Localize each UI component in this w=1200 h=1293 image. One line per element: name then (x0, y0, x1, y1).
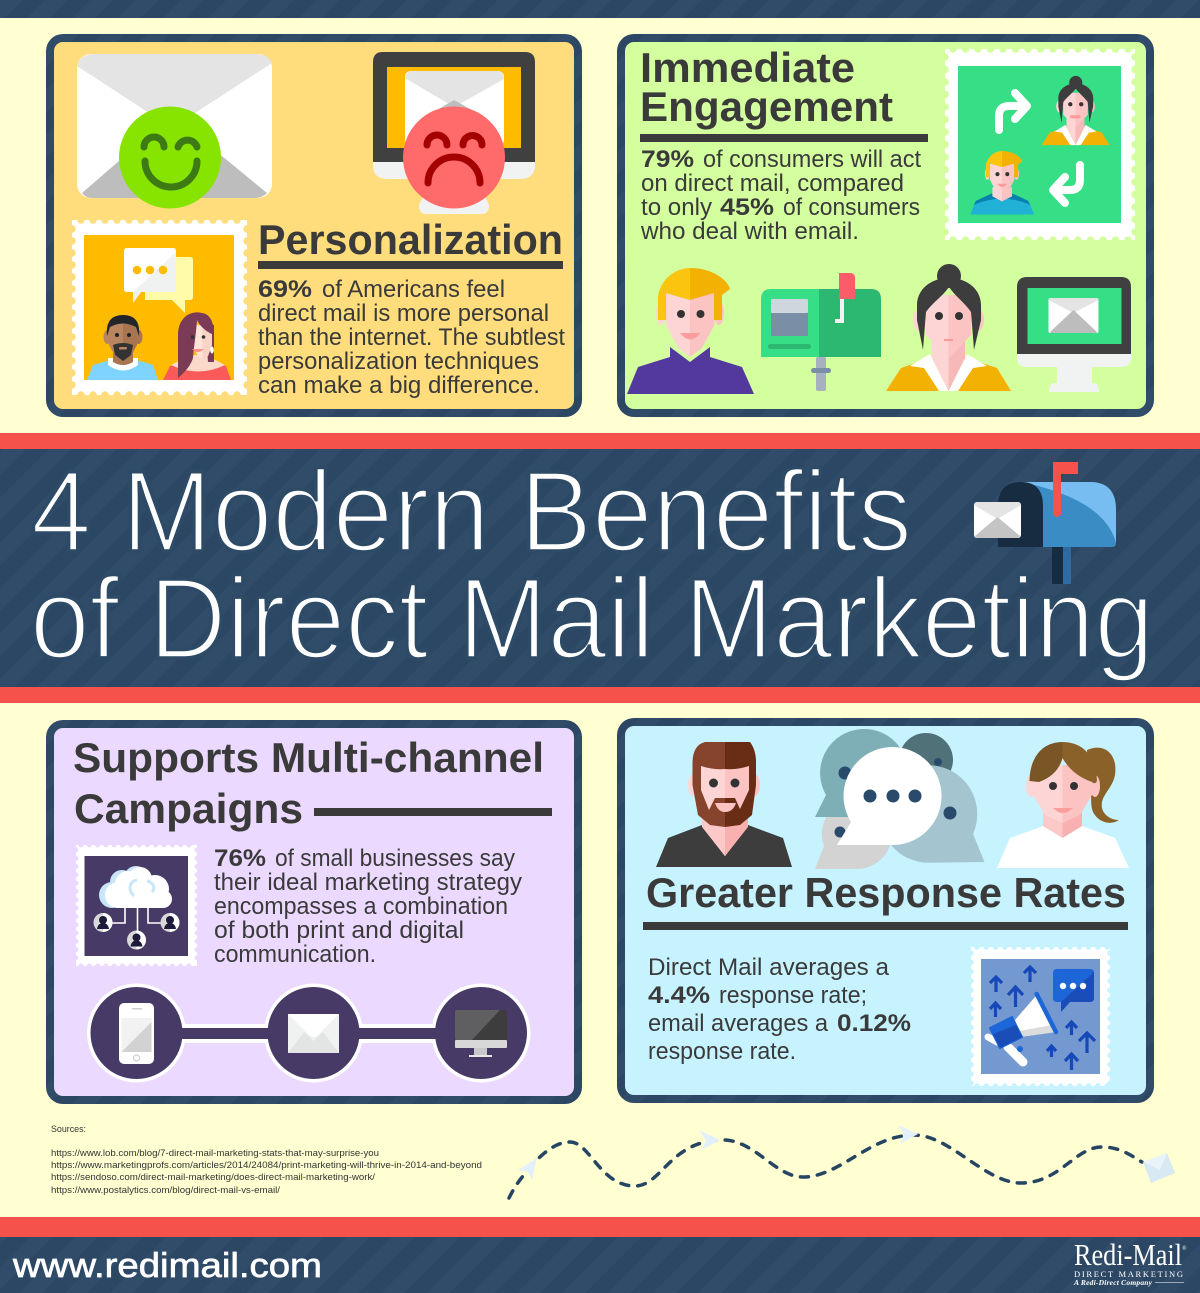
body text: multi-channel: their ideal marketing strategy (214, 869, 522, 896)
heading: supports multi-channel campaigns (73, 734, 544, 832)
sources list (51, 1124, 482, 1196)
icon: green mailbox (761, 273, 881, 391)
heading rule (258, 261, 563, 269)
body text: response rates: Direct Mail averages a (648, 954, 890, 981)
logo: redi-mail: Redi-Mail (1074, 1237, 1182, 1272)
sources list: Sources: (51, 1124, 86, 1135)
title band (0, 449, 1200, 687)
heading rule (640, 134, 928, 142)
panel: multi-channel (46, 720, 582, 1104)
body text: personalization: than the internet. The subtlest (258, 324, 565, 351)
body text: personalization: 69% (258, 276, 312, 303)
icon: blue mailbox (974, 462, 1116, 584)
body text: personalization: direct mail is more personal (258, 300, 549, 327)
red band bottom (0, 687, 1200, 703)
sources list: https://www.lob.com/blog/7-direct-mail-marketing-stats-that-may-surprise-you (51, 1148, 379, 1159)
heading: supports multi-channel campaigns: Supports Multi-channel (73, 734, 544, 781)
sources list: https://www.postalytics.com/blog/direct-mail-vs-email/ (51, 1185, 280, 1196)
panel frame (46, 34, 582, 417)
small woman (1041, 76, 1110, 145)
body text: engagement (640, 146, 921, 245)
body text: engagement: 79% (641, 146, 694, 173)
body text: personalization: personalization techniques (258, 348, 539, 375)
stamp: megaphone (971, 947, 1110, 1086)
icon: monitor with sad face (373, 52, 535, 214)
body text: multi-channel (214, 845, 522, 968)
channel diagram: phone, mail, desktop (87, 984, 530, 1082)
body text: personalization: of Americans feel (322, 276, 505, 303)
dashed flight path with paper planes (509, 1125, 1175, 1198)
person: woman with ponytail (997, 742, 1129, 868)
heading: immediate engagement: Engagement (640, 83, 893, 130)
body text: engagement: to only (641, 194, 712, 221)
body text: engagement: of consumers will act (703, 146, 921, 173)
body text: engagement: who deal with email. (640, 218, 859, 245)
top band (0, 0, 1200, 18)
body text: response rates: response rate. (648, 1038, 796, 1065)
heading rule (314, 808, 552, 816)
body text: response rates: 4.4% (648, 982, 710, 1009)
person: blond man (627, 268, 754, 394)
panel frame (617, 34, 1154, 417)
body text: response rates: response rate; (719, 982, 867, 1009)
body text: engagement: on direct mail, compared (641, 170, 904, 197)
body text: response rates: 0.12% (837, 1010, 911, 1037)
logo: redi-mail: ® (1182, 1245, 1187, 1252)
icon: phone (119, 1003, 154, 1064)
icon: envelope with smiley (77, 54, 272, 208)
body text: response rates (648, 954, 911, 1065)
panel: response rates (617, 718, 1154, 1103)
heading: greater response rates: Greater Response Rates (646, 869, 1126, 916)
body text: engagement: of consumers (783, 194, 920, 221)
heading: immediate engagement (640, 44, 893, 130)
body text: multi-channel: encompasses a combination (214, 893, 508, 920)
man in stamp (87, 315, 158, 380)
red band footer (0, 1217, 1200, 1237)
heading: supports multi-channel campaigns: Campaigns (74, 785, 303, 832)
icon: monitor with envelope (1017, 277, 1131, 392)
stamp: cloud network (76, 845, 197, 966)
icon: desktop (455, 1010, 507, 1057)
body text: multi-channel: of both print and digital (214, 917, 464, 944)
body text: multi-channel: 76% (214, 845, 266, 872)
footer band (0, 1237, 1200, 1293)
logo: redi-mail (1073, 1237, 1187, 1287)
small man (970, 151, 1034, 215)
logo: redi-mail: DIRECT MARKETING (1074, 1269, 1183, 1279)
panel frame (617, 718, 1154, 1103)
person: bearded man (656, 742, 792, 867)
body text: personalization (258, 276, 565, 399)
heading: personalization: Personalization (258, 216, 563, 263)
sources list: https://sendoso.com/direct-mail-marketing/does-direct-mail-marketing-work/ (51, 1172, 375, 1183)
stamp: two people talking (72, 220, 247, 395)
person: woman with bun (886, 264, 1011, 391)
panel: immediate engagement (617, 34, 1154, 417)
body text: response rates: email averages a (648, 1010, 829, 1037)
heading rule (643, 922, 1128, 930)
icon: envelope (288, 1014, 339, 1053)
woman in stamp (163, 312, 231, 380)
body text: multi-channel: communication. (214, 941, 376, 968)
heading: immediate engagement: Immediate (640, 44, 855, 91)
body text: personalization: can make a big difference. (258, 372, 540, 399)
sources list: https://www.marketingprofs.com/articles/2014/24084/print-marketing-will-thrive-in-2014-and-beyond (51, 1160, 482, 1171)
panel frame (46, 720, 582, 1104)
website url: www.redimail.com (12, 1247, 322, 1285)
title: 4 Modern Benefits (31, 448, 912, 576)
body text: engagement: 45% (720, 194, 774, 221)
red band top (0, 433, 1200, 449)
logo: redi-mail: A Redi-Direct Company (1073, 1278, 1153, 1287)
icon: speech bubbles (815, 729, 984, 869)
stamp: exchange between people (945, 49, 1135, 240)
title (30, 448, 1154, 683)
panel: personalization (46, 34, 582, 417)
body text: multi-channel: of small businesses say (275, 845, 515, 872)
